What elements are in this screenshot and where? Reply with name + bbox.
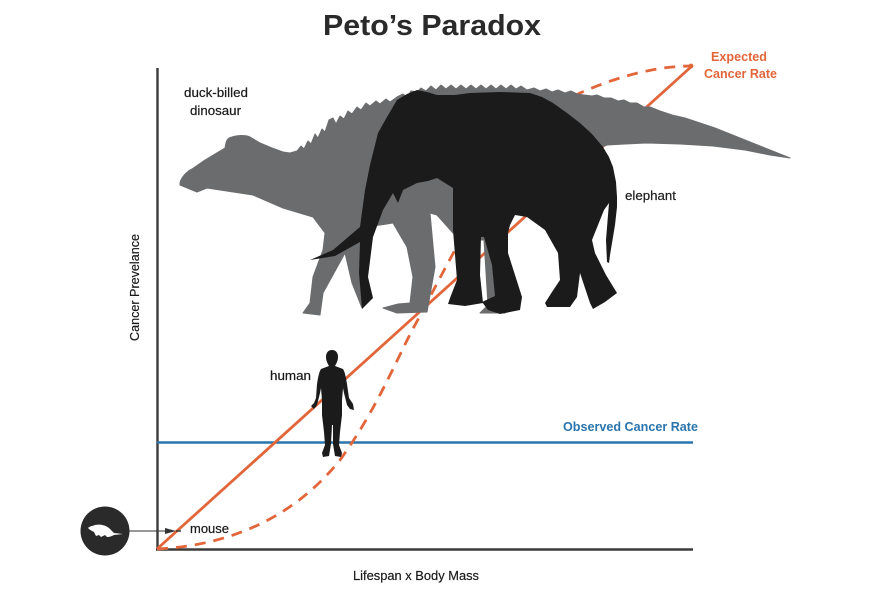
label: elephant: elephant xyxy=(625,188,676,203)
expected cancer rate label: Cancer Rate xyxy=(704,66,777,81)
expected cancer rate label: Expected xyxy=(711,49,767,64)
dinosaur silhouette xyxy=(180,85,790,315)
label: duck-billed dinosaur: duck-billed xyxy=(184,85,248,100)
x axis label: Lifespan x Body Mass xyxy=(353,568,479,583)
label: human: human xyxy=(270,368,311,383)
observed cancer rate label: Observed Cancer Rate xyxy=(563,419,698,434)
label: mouse: mouse xyxy=(190,521,229,536)
expected cancer rate line xyxy=(157,66,692,549)
label: duck-billed dinosaur xyxy=(184,85,248,118)
expected cancer rate dashed curve xyxy=(157,66,692,549)
expected cancer rate end dot xyxy=(689,64,693,68)
expected cancer rate label xyxy=(704,49,777,81)
human silhouette xyxy=(311,350,354,457)
observed cancer rate line xyxy=(157,441,693,444)
y axis label: Cancer Prevelance xyxy=(127,234,142,341)
icon: mouse in circle xyxy=(80,506,130,556)
mouse arrow xyxy=(128,528,181,534)
y axis line xyxy=(156,68,159,550)
x axis line xyxy=(156,548,693,551)
elephant silhouette xyxy=(310,90,617,314)
title: Peto’s Paradox xyxy=(323,10,541,42)
label: duck-billed dinosaur: dinosaur xyxy=(190,103,242,118)
